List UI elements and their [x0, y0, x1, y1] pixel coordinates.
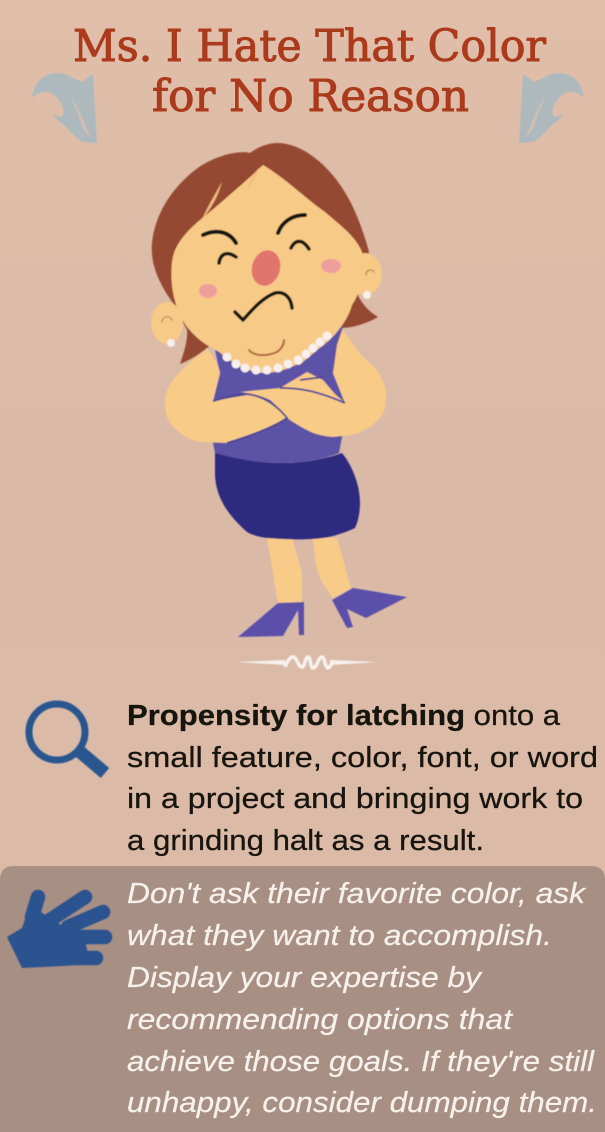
icon: left leaf ornament: [32, 73, 97, 143]
title: [73, 21, 547, 122]
top: [213, 325, 345, 463]
right ear: [348, 253, 382, 295]
right arm: [240, 330, 386, 437]
illustration: angry woman with crossed arms: [151, 143, 407, 637]
left arm: [165, 349, 287, 443]
text: description: a grinding halt as a result.: [127, 825, 484, 857]
nose: [248, 247, 284, 289]
right shoe: [332, 588, 407, 628]
title: Ms. I Hate That Color: [73, 21, 547, 72]
hair: [152, 143, 378, 364]
arm fold line: [213, 377, 345, 443]
panel: advice: [0, 866, 605, 1132]
text: advice: achieve those goals. If they're still: [127, 1046, 596, 1078]
cheeks: [199, 259, 341, 298]
text: advice: [127, 878, 597, 1119]
icon: blue hand: [7, 897, 105, 968]
text: advice: recommending options that: [127, 1004, 514, 1036]
text: advice: Display your expertise by: [127, 962, 483, 994]
face features: [162, 215, 374, 355]
hair highlights: [202, 168, 259, 219]
text: advice: unhappy, consider dumping them.: [127, 1087, 597, 1119]
text: description: in a project and bringing work to: [127, 783, 583, 815]
pearl necklace and earrings: [167, 291, 371, 374]
left ear: [151, 302, 183, 344]
title: for No Reason: [152, 71, 469, 122]
skirt: [215, 452, 360, 539]
text: description: Propensity for latching onto a: [127, 700, 561, 732]
text: advice: what they want to accomplish.: [127, 920, 552, 952]
divider flourish: [237, 657, 377, 668]
text: description: [127, 700, 598, 857]
right leg: [313, 538, 351, 598]
left shoe: [238, 602, 304, 637]
text: description: small feature, color, font, or word: [127, 742, 598, 774]
text: advice: Don't ask their favorite color, ask: [127, 878, 587, 910]
icon: right leaf ornament: [519, 73, 584, 143]
icon: magnifying glass: [29, 704, 105, 773]
left leg: [267, 538, 302, 603]
neck and face: [171, 165, 364, 373]
